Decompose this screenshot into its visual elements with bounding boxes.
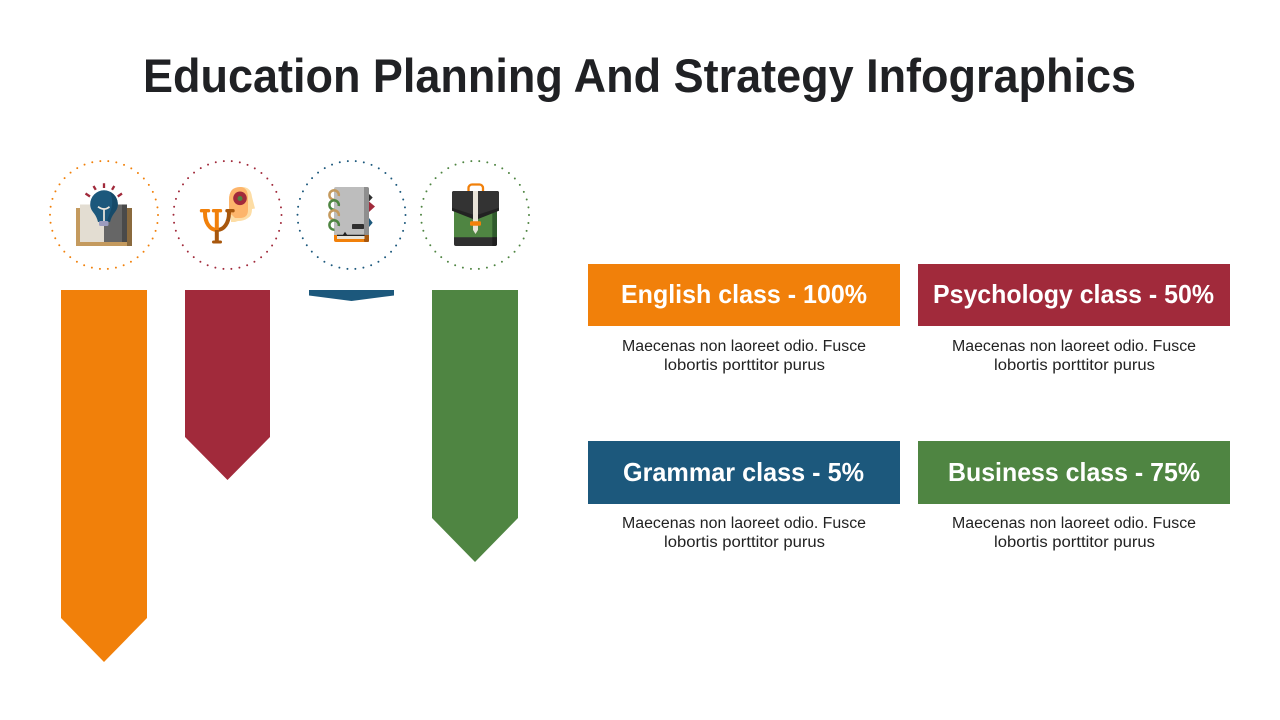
- panel: grammar class: Maecenas non laoreet odio. Fusce: [622, 515, 866, 532]
- panel: grammar class: lobortis porttitor purus: [664, 534, 825, 551]
- icon: book with light bulb in dotted circle: [50, 161, 158, 269]
- panel: psychology class: [918, 264, 1230, 374]
- panel: grammar class: Grammar class - 5%: [623, 457, 864, 487]
- panel: psychology class: Maecenas non laoreet odio. Fusce: [952, 338, 1196, 355]
- panel: business class: [918, 441, 1230, 551]
- icon: psychology head and psi symbol in dotted circle: [174, 161, 282, 269]
- panel: english class: English class - 100%: [621, 279, 867, 309]
- panel: english class: [588, 264, 900, 374]
- panel: english class: lobortis porttitor purus: [664, 357, 825, 374]
- panel: grammar class: [588, 441, 900, 551]
- bar: grammar 5%: [309, 290, 394, 301]
- panel: business class: Business class - 75%: [948, 457, 1200, 487]
- panel: psychology class: Psychology class - 50%: [933, 279, 1214, 309]
- icon: backpack in dotted circle: [421, 161, 529, 269]
- panel: psychology class: lobortis porttitor purus: [994, 357, 1155, 374]
- bar: psychology 50%: [185, 290, 270, 480]
- bar: english 100%: [61, 290, 147, 662]
- title: Education Planning And Strategy Infographics: [143, 49, 1136, 102]
- bar: business 75%: [432, 290, 518, 562]
- panel: business class: Maecenas non laoreet odio. Fusce: [952, 515, 1196, 532]
- panel: english class: Maecenas non laoreet odio. Fusce: [622, 338, 866, 355]
- panel: business class: lobortis porttitor purus: [994, 534, 1155, 551]
- icon: spiral notebook in dotted circle: [298, 161, 406, 269]
